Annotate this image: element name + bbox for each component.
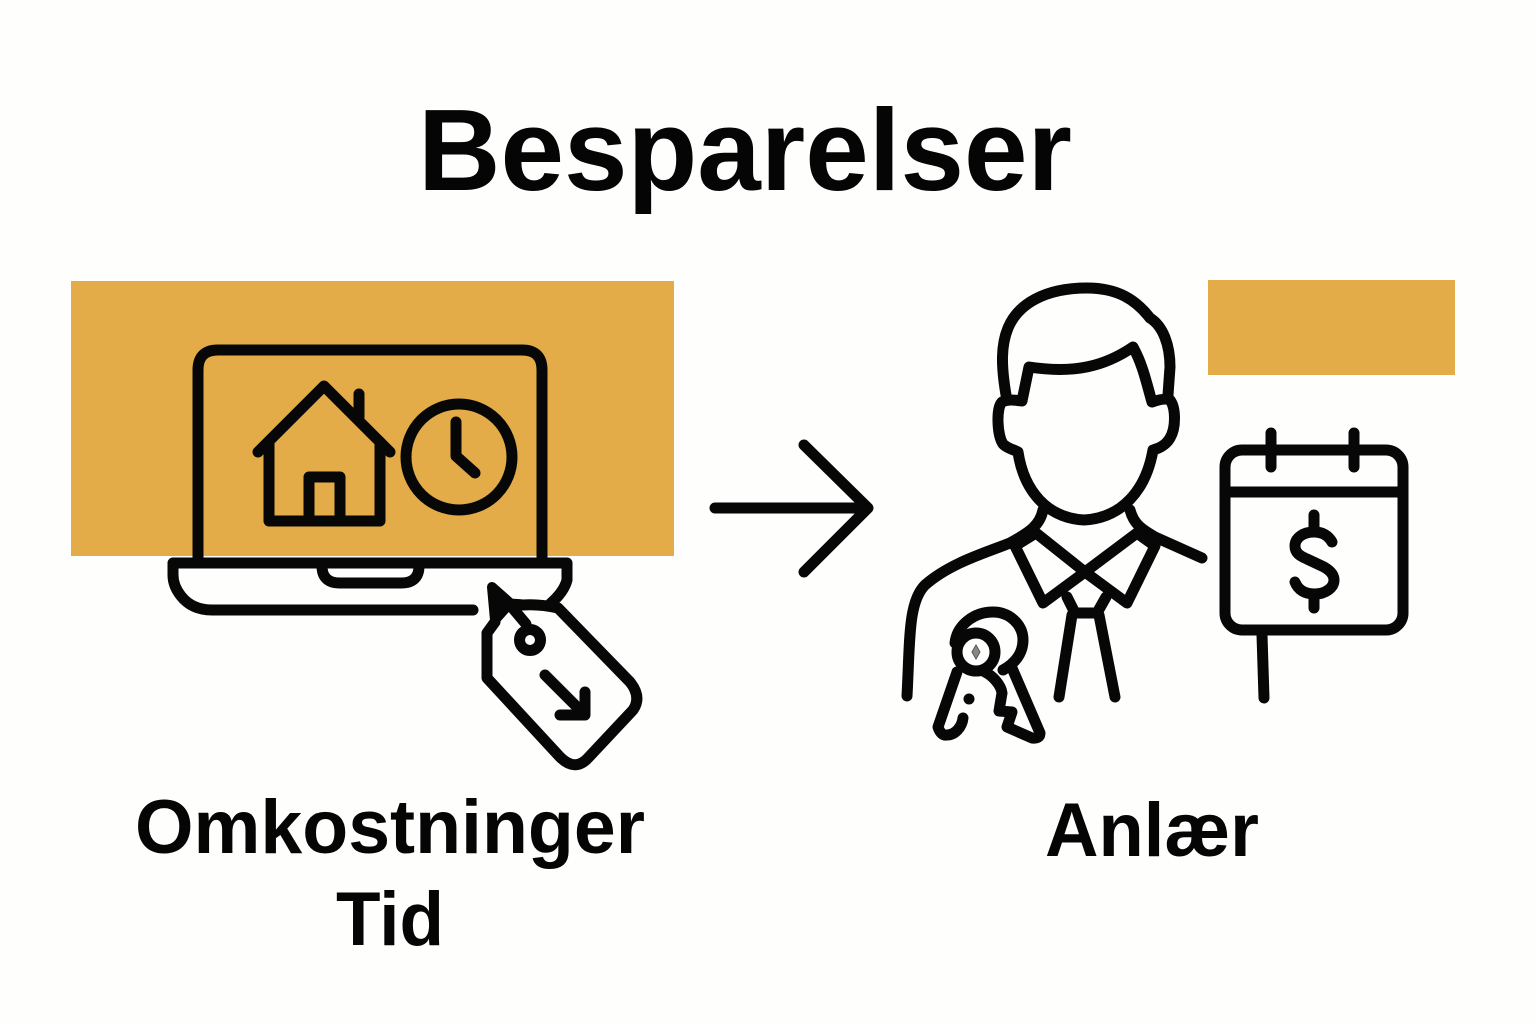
shoulders — [907, 510, 1043, 696]
icon: house — [258, 386, 390, 521]
icon: clock — [406, 404, 512, 510]
icon: person — [907, 288, 1202, 697]
face — [998, 347, 1174, 520]
hair — [1002, 288, 1170, 395]
panel: right accent rectangle — [1208, 280, 1455, 375]
panel: left accent rectangle — [71, 281, 674, 556]
label: Anlær: Anlær — [1045, 788, 1259, 873]
icon: keys — [938, 612, 1040, 738]
icon: price tag — [487, 587, 637, 765]
label: Tid: Tid — [336, 877, 444, 962]
title: Besparelser — [418, 85, 1072, 215]
tie — [1059, 597, 1115, 697]
icon: calendar with dollar — [1225, 433, 1403, 698]
collar — [1015, 533, 1155, 603]
arrow — [715, 445, 868, 572]
icon: laptop — [173, 350, 567, 610]
label: Omkostninger: Omkostninger — [135, 785, 645, 870]
